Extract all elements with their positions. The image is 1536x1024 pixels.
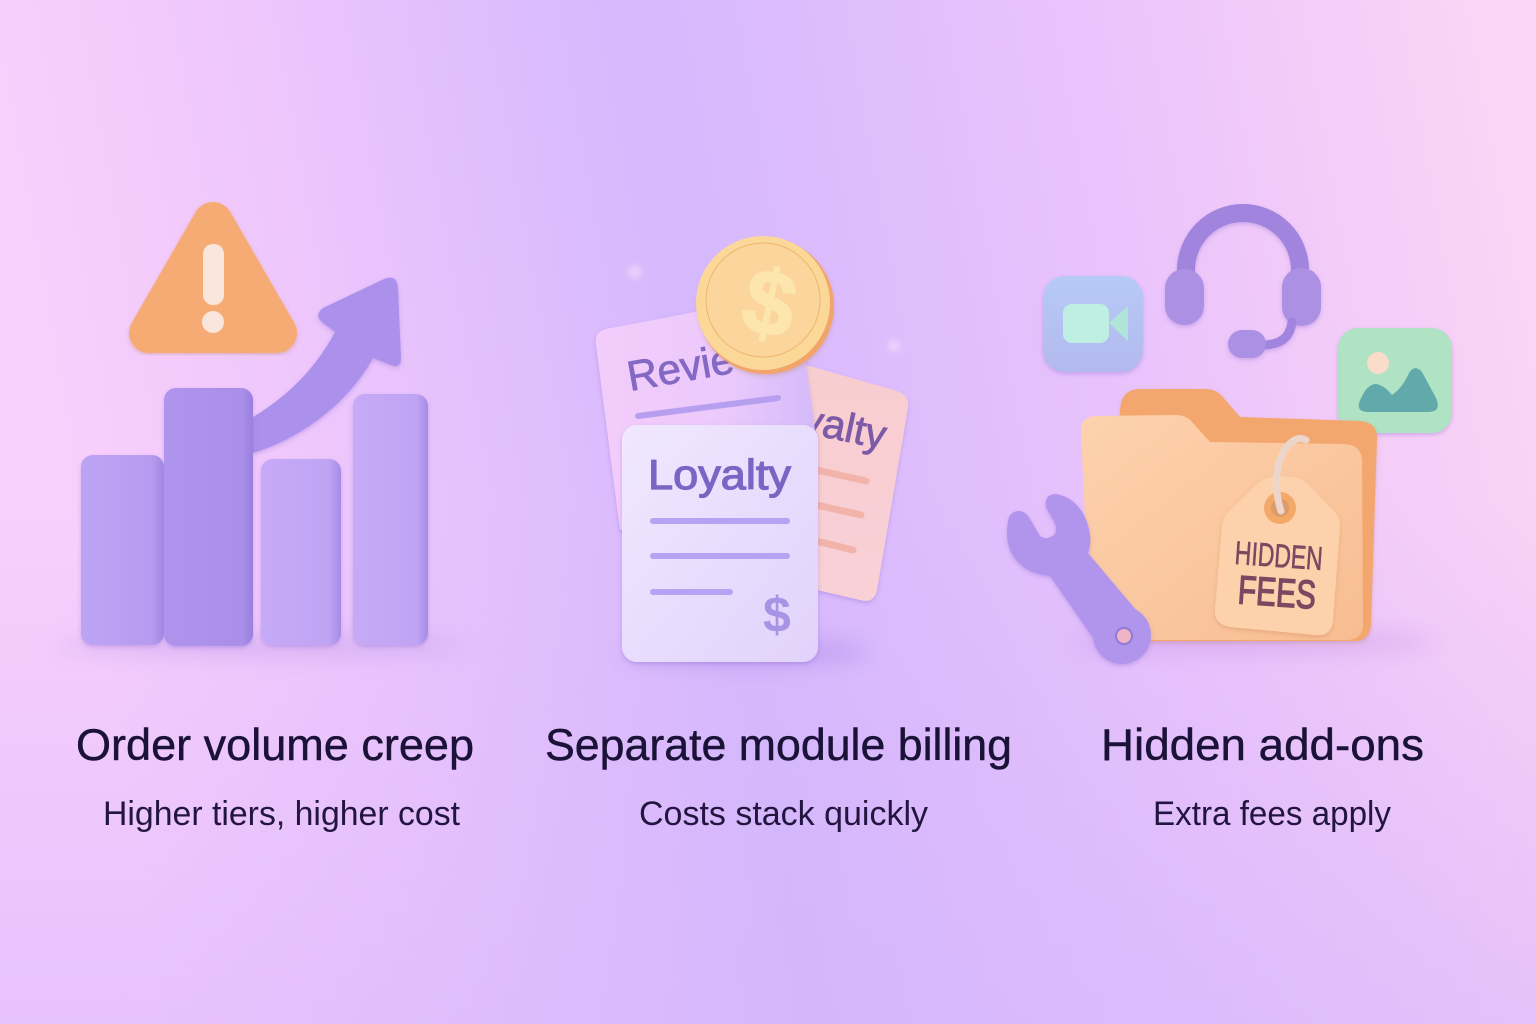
- icon: folder: [1081, 389, 1377, 641]
- icon: rising arrow: [253, 278, 401, 453]
- icon: hidden fees tag: HIDDEN: [1234, 534, 1324, 577]
- document: review sheet: [596, 300, 815, 530]
- bar chart: [81, 388, 428, 646]
- ground shadow: [620, 640, 870, 664]
- icon: video camera: [1043, 276, 1143, 372]
- text: costs stack: Costs stack quickly: [639, 795, 928, 833]
- text: extra fees: Extra fees apply: [1153, 795, 1391, 833]
- icon: dollar coin: $: [734, 248, 805, 359]
- document: loyalty invoice: $: [763, 587, 791, 643]
- heading: hidden add-ons: Hidden add-ons: [1101, 721, 1424, 770]
- icon: dollar coin: [696, 236, 834, 374]
- panel: order volume creep: [55, 222, 465, 654]
- document: review sheet: Revie: [623, 335, 737, 400]
- icon: headset: [1165, 213, 1321, 358]
- icon: hidden fees tag: FEES: [1237, 568, 1317, 618]
- document: loyalty invoice: [622, 425, 818, 662]
- document: pink loyalty sheet: [799, 365, 908, 601]
- document: loyalty invoice: Loyalty: [648, 451, 791, 498]
- decorative glow dots: [628, 265, 900, 352]
- ground shadow: [55, 638, 465, 654]
- icon: warning triangle: [149, 222, 277, 333]
- panel: hidden add-ons: [1007, 213, 1452, 664]
- document: pink loyalty sheet: yalty: [799, 396, 891, 458]
- heading: order volume creep: Order volume creep: [76, 721, 474, 770]
- icon: wrench: [1007, 494, 1151, 664]
- panel: separate module billing: [596, 236, 908, 664]
- ground shadow: [1065, 633, 1435, 651]
- text: higher tiers: Higher tiers, higher cost: [103, 795, 461, 833]
- icon: image tile: [1338, 328, 1452, 433]
- icon: hidden fees tag: [1215, 439, 1340, 635]
- heading: separate module billing: Separate module billing: [545, 721, 1012, 770]
